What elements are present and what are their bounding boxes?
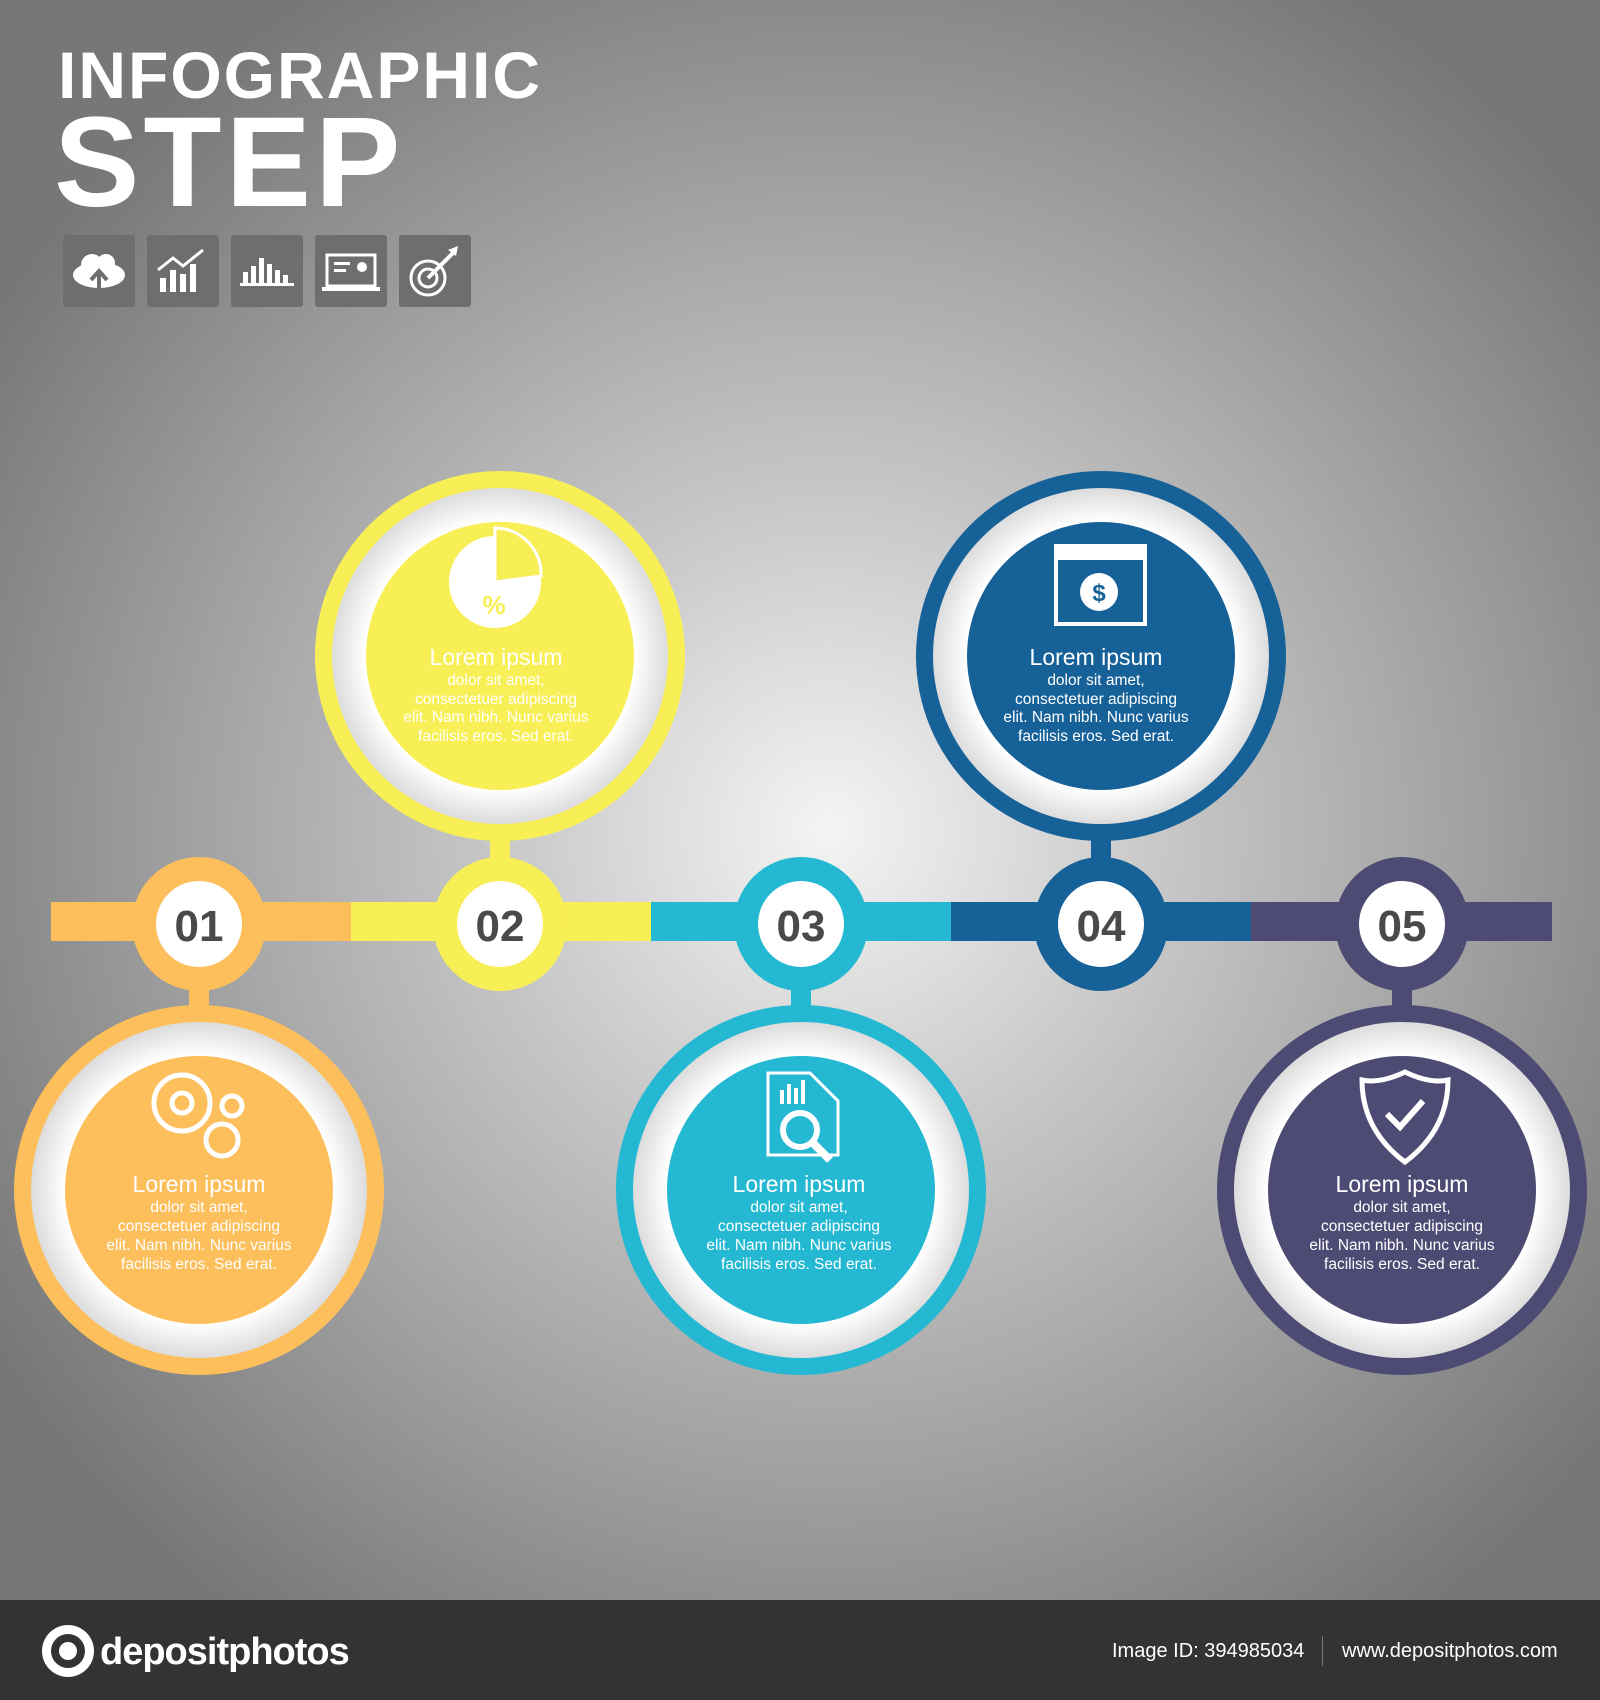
step 4: dolor sit amet, — [1047, 672, 1145, 689]
step 4: Lorem ipsum — [1030, 644, 1162, 670]
step 2: % — [482, 590, 506, 620]
step 3: Lorem ipsum — [733, 1171, 865, 1197]
header icons — [63, 235, 471, 307]
step 4: $ — [1092, 580, 1106, 607]
step 5: consectetuer adipiscing — [1321, 1218, 1483, 1235]
step 2: Lorem ipsum — [430, 644, 562, 670]
step 1: consectetuer adipiscing — [118, 1218, 280, 1235]
step 2: elit. Nam nibh. Nunc varius — [403, 709, 589, 726]
step 4: consectetuer adipiscing — [1015, 691, 1177, 708]
timeline bar — [51, 902, 1552, 941]
footer — [0, 1600, 1600, 1700]
step 5: elit. Nam nibh. Nunc varius — [1309, 1237, 1495, 1254]
step 1: elit. Nam nibh. Nunc varius — [106, 1237, 292, 1254]
title — [54, 38, 542, 234]
step 2: 02 — [476, 902, 524, 951]
step 3: facilisis eros. Sed erat. — [721, 1256, 877, 1273]
title: INFOGRAPHIC — [58, 38, 542, 112]
step 5: dolor sit amet, — [1353, 1199, 1451, 1216]
step 1 — [14, 857, 384, 1375]
step 4: 04 — [1077, 902, 1126, 951]
step 4 — [916, 471, 1286, 991]
step 3: elit. Nam nibh. Nunc varius — [706, 1237, 892, 1254]
footer: Image ID: 394985034 — [1112, 1640, 1304, 1662]
step 3: consectetuer adipiscing — [718, 1218, 880, 1235]
step 2: consectetuer adipiscing — [415, 691, 577, 708]
title: STEP — [54, 91, 404, 234]
step 3: 03 — [777, 902, 825, 951]
step 1: 01 — [175, 902, 223, 951]
step 5: Lorem ipsum — [1336, 1171, 1468, 1197]
step 4: facilisis eros. Sed erat. — [1018, 728, 1174, 745]
footer: www.depositphotos.com — [1341, 1640, 1558, 1662]
step 5 — [1217, 857, 1587, 1375]
footer: depositphotos — [100, 1631, 349, 1673]
step 1: Lorem ipsum — [133, 1171, 265, 1197]
step 3 — [616, 857, 986, 1375]
step 2: facilisis eros. Sed erat. — [418, 728, 574, 745]
step 3: dolor sit amet, — [750, 1199, 848, 1216]
step 1: facilisis eros. Sed erat. — [121, 1256, 277, 1273]
step 5: 05 — [1378, 902, 1426, 951]
step 2 — [315, 471, 685, 991]
step 2: dolor sit amet, — [447, 672, 545, 689]
step 4: elit. Nam nibh. Nunc varius — [1003, 709, 1189, 726]
step 5: facilisis eros. Sed erat. — [1324, 1256, 1480, 1273]
step 1: dolor sit amet, — [150, 1199, 248, 1216]
